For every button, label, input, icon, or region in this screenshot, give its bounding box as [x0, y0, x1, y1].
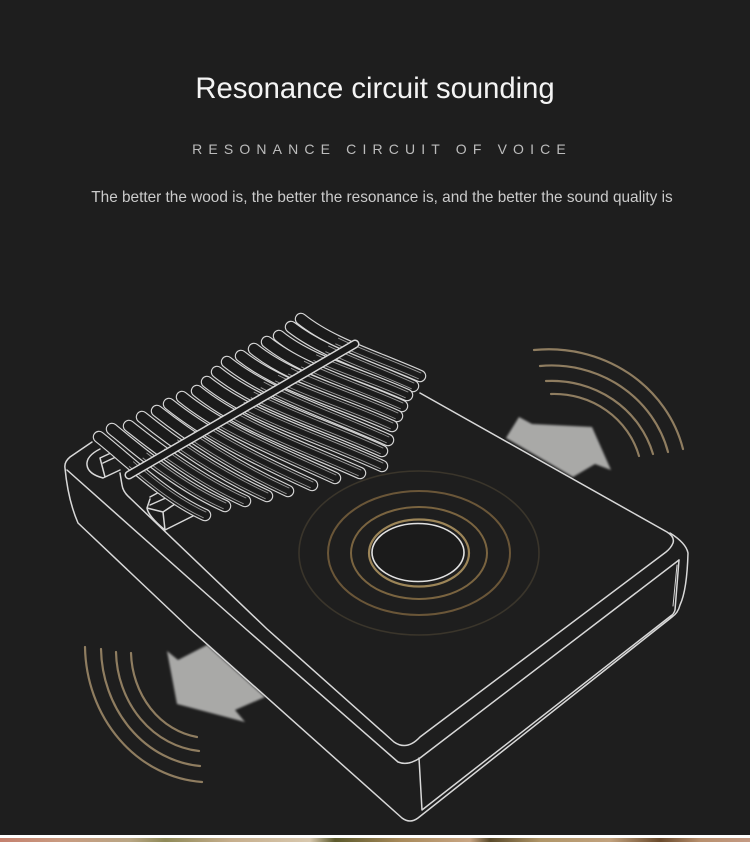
top surface edge [120, 393, 673, 746]
right arrow [506, 417, 611, 477]
description text: The better the wood is, the better the resonance is, and the better the sound quality is [91, 189, 673, 206]
side bevel line [67, 470, 679, 763]
right sound waves [534, 349, 683, 456]
sound hole [372, 524, 464, 582]
sound rings around the hole [299, 471, 539, 635]
subtitle: RESONANCE CIRCUIT OF VOICE [192, 141, 572, 157]
bridge bar [129, 344, 355, 475]
white divider [0, 835, 750, 838]
title: Resonance circuit sounding [195, 73, 555, 105]
end panel [419, 560, 679, 810]
tines [99, 319, 420, 515]
kalimba body outline [65, 393, 688, 821]
left sound waves [85, 647, 202, 782]
outer base outline [65, 442, 688, 821]
photo strip [0, 838, 750, 842]
far bridge block [87, 449, 120, 478]
left arrow [167, 645, 265, 722]
near bridge block [147, 490, 195, 530]
